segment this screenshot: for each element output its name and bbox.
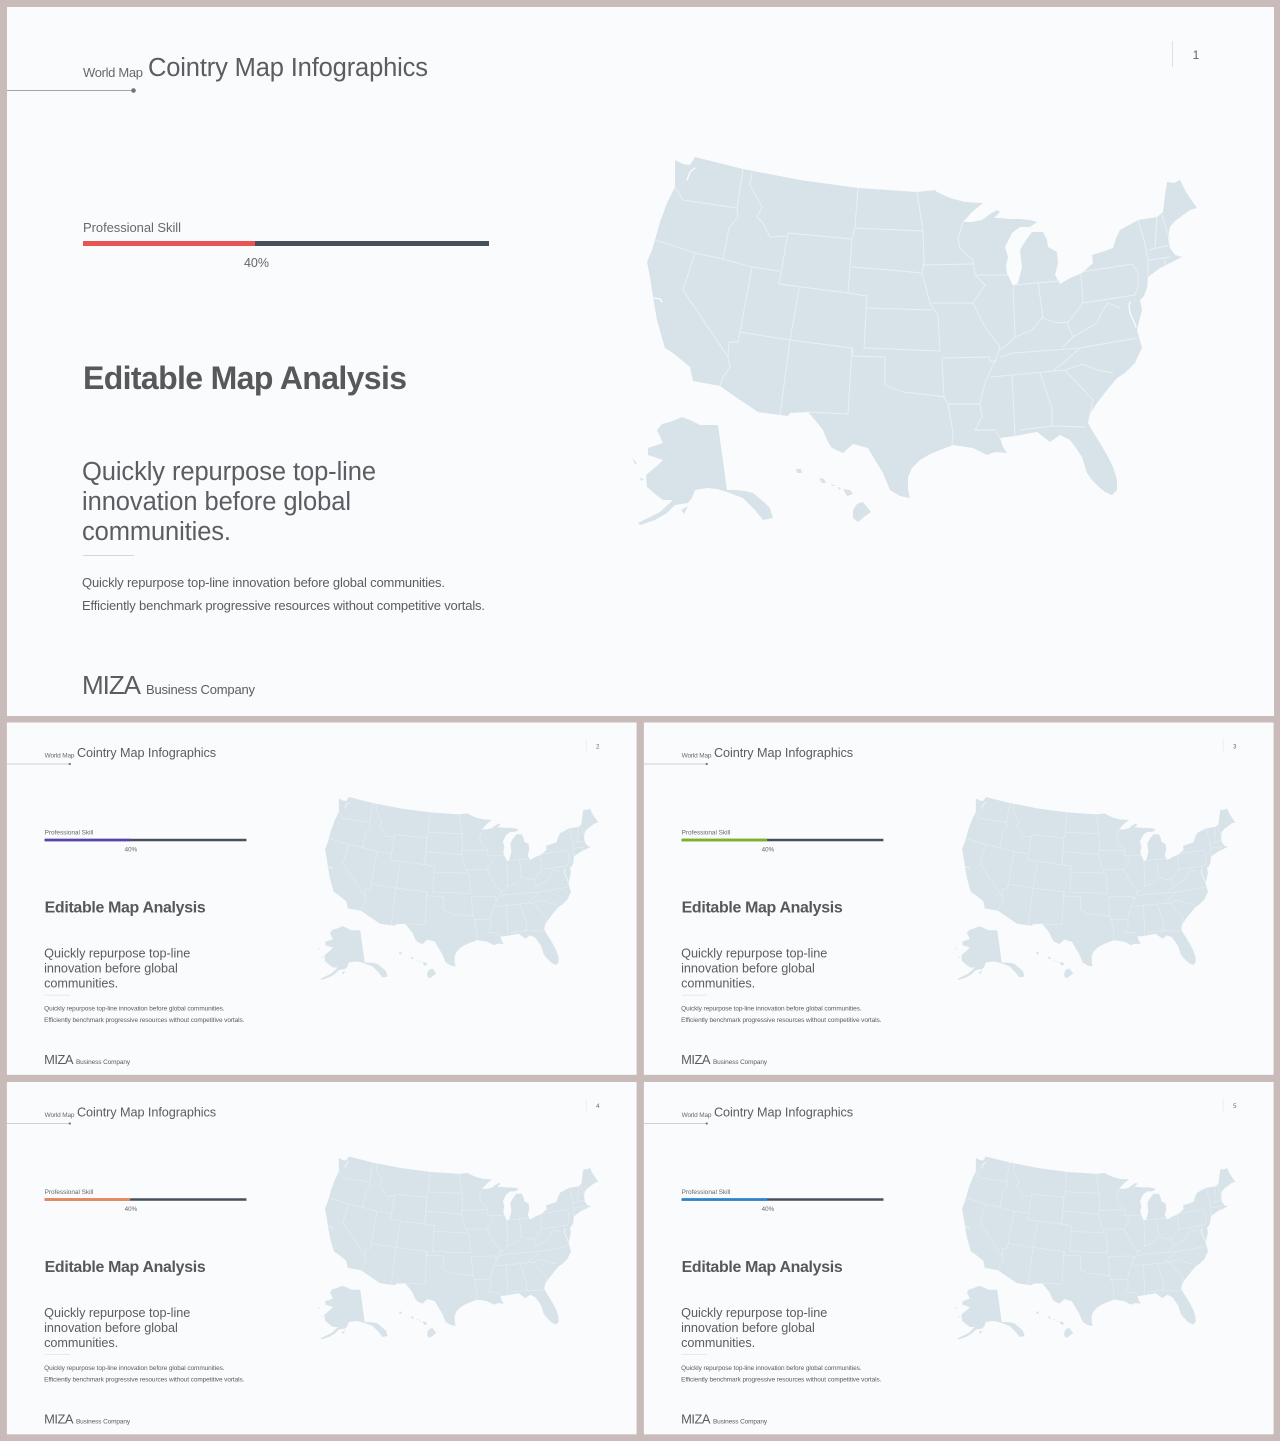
brand [82, 670, 256, 700]
progress value: 40% [125, 1206, 138, 1213]
map: United States [955, 797, 1235, 980]
subheading: Quickly repurpose top-line [44, 947, 190, 961]
panel: slide 5 blue [644, 1082, 1274, 1434]
body text: Efficiently benchmark progressive resources without competitive vortals. [82, 598, 485, 613]
header rule with dot [644, 1122, 708, 1125]
subheading: Quickly repurpose top-line [44, 1306, 190, 1320]
subheading: innovation before global [681, 961, 815, 975]
brand [44, 1411, 131, 1426]
skill label: Professional Skill [45, 829, 93, 836]
skill label: Professional Skill [83, 220, 181, 235]
body text: Quickly repurpose top-line innovation before global communities. [82, 575, 445, 590]
heading: Editable Map Analysis [682, 899, 843, 916]
subheading [44, 947, 190, 990]
brand: Business Company [76, 1059, 131, 1066]
panel: main slide 1 [7, 7, 1274, 716]
brand [44, 1052, 131, 1067]
page number: 2 [596, 744, 600, 750]
progress value: 40% [762, 1206, 775, 1213]
panel: slide 4 orange [7, 1082, 637, 1434]
subheading: innovation before global [44, 1321, 178, 1335]
progress bar [682, 1198, 883, 1201]
progress bar [45, 839, 246, 841]
page number: 1 [1193, 48, 1200, 62]
subheading: Quickly repurpose top-line [681, 947, 827, 961]
brand: Business Company [76, 1418, 131, 1425]
brand: MIZA [44, 1052, 74, 1067]
header rule with dot [644, 763, 708, 765]
panel: slide 3 green [644, 722, 1274, 1075]
skill label: Professional Skill [45, 1189, 93, 1196]
body text: Efficiently benchmark progressive resources without competitive vortals. [681, 1377, 882, 1384]
heading: Editable Map Analysis [45, 899, 206, 916]
progress value: 40% [125, 847, 138, 854]
brand: MIZA [82, 670, 142, 700]
title: Cointry Map Infographics [77, 1105, 216, 1119]
skill label: Professional Skill [682, 829, 730, 836]
header rule with dot [7, 763, 71, 765]
brand [681, 1411, 768, 1426]
brand: MIZA [681, 1411, 711, 1426]
subheading: communities. [82, 518, 231, 546]
heading: Editable Map Analysis [682, 1259, 843, 1276]
subheading: innovation before global [82, 488, 351, 516]
divider [682, 1354, 707, 1356]
skill label: Professional Skill [682, 1189, 730, 1196]
subheading [82, 458, 376, 546]
brand [681, 1052, 768, 1067]
page number: 4 [596, 1104, 600, 1110]
brand: Business Company [713, 1418, 768, 1425]
page number: 3 [1233, 744, 1237, 750]
body text: Quickly repurpose top-line innovation before global communities. [44, 1365, 225, 1372]
map: United States [955, 1157, 1235, 1339]
body text [681, 1006, 882, 1024]
subheading [681, 1306, 827, 1350]
body text [681, 1365, 882, 1384]
page number: 5 [1233, 1104, 1237, 1110]
body text: Quickly repurpose top-line innovation before global communities. [681, 1006, 862, 1013]
header label: World Map: World Map [45, 752, 75, 759]
progress bar [83, 241, 489, 246]
subheading: innovation before global [681, 1321, 815, 1335]
header label: World Map: World Map [83, 65, 143, 80]
subheading [681, 947, 827, 990]
progress value: 40% [762, 847, 775, 854]
progress bar [45, 1198, 246, 1201]
header rule with dot [7, 88, 136, 93]
page number [1172, 41, 1200, 67]
heading: Editable Map Analysis [83, 360, 407, 396]
subheading [44, 1306, 190, 1350]
map: United States [632, 157, 1197, 525]
divider [682, 994, 707, 996]
header label: World Map: World Map [682, 1112, 712, 1119]
page number [586, 1099, 600, 1112]
page number [1223, 739, 1237, 752]
title: Cointry Map Infographics [714, 1105, 853, 1119]
body text: Efficiently benchmark progressive resources without competitive vortals. [44, 1377, 245, 1384]
brand: MIZA [44, 1411, 74, 1426]
title: Cointry Map Infographics [714, 746, 853, 760]
subheading: innovation before global [44, 961, 178, 975]
header label: World Map: World Map [45, 1112, 75, 1119]
map: United States [318, 797, 598, 980]
divider [45, 1354, 70, 1356]
body text: Quickly repurpose top-line innovation before global communities. [44, 1006, 225, 1013]
subheading: Quickly repurpose top-line [82, 458, 376, 486]
brand: MIZA [681, 1052, 711, 1067]
subheading: communities. [681, 1336, 755, 1350]
subheading: Quickly repurpose top-line [681, 1306, 827, 1320]
body text [82, 575, 485, 613]
title: Cointry Map Infographics [77, 746, 216, 760]
progress value: 40% [244, 256, 269, 270]
header rule with dot [7, 1122, 71, 1125]
divider [45, 994, 70, 996]
subheading: communities. [44, 976, 118, 990]
brand: Business Company [146, 682, 256, 697]
heading: Editable Map Analysis [45, 1259, 206, 1276]
page number [586, 739, 600, 752]
body text [44, 1006, 245, 1024]
body text: Quickly repurpose top-line innovation before global communities. [681, 1365, 862, 1372]
divider [83, 554, 134, 556]
subheading: communities. [681, 976, 755, 990]
body text: Efficiently benchmark progressive resources without competitive vortals. [44, 1017, 245, 1024]
subheading: communities. [44, 1336, 118, 1350]
progress bar [682, 839, 883, 841]
header label: World Map: World Map [682, 752, 712, 759]
body text: Efficiently benchmark progressive resources without competitive vortals. [681, 1017, 882, 1024]
brand: Business Company [713, 1059, 768, 1066]
panel: slide 2 purple [7, 722, 637, 1075]
page number [1223, 1099, 1237, 1112]
body text [44, 1365, 245, 1384]
title: Cointry Map Infographics [148, 54, 428, 82]
map: United States [318, 1157, 598, 1339]
